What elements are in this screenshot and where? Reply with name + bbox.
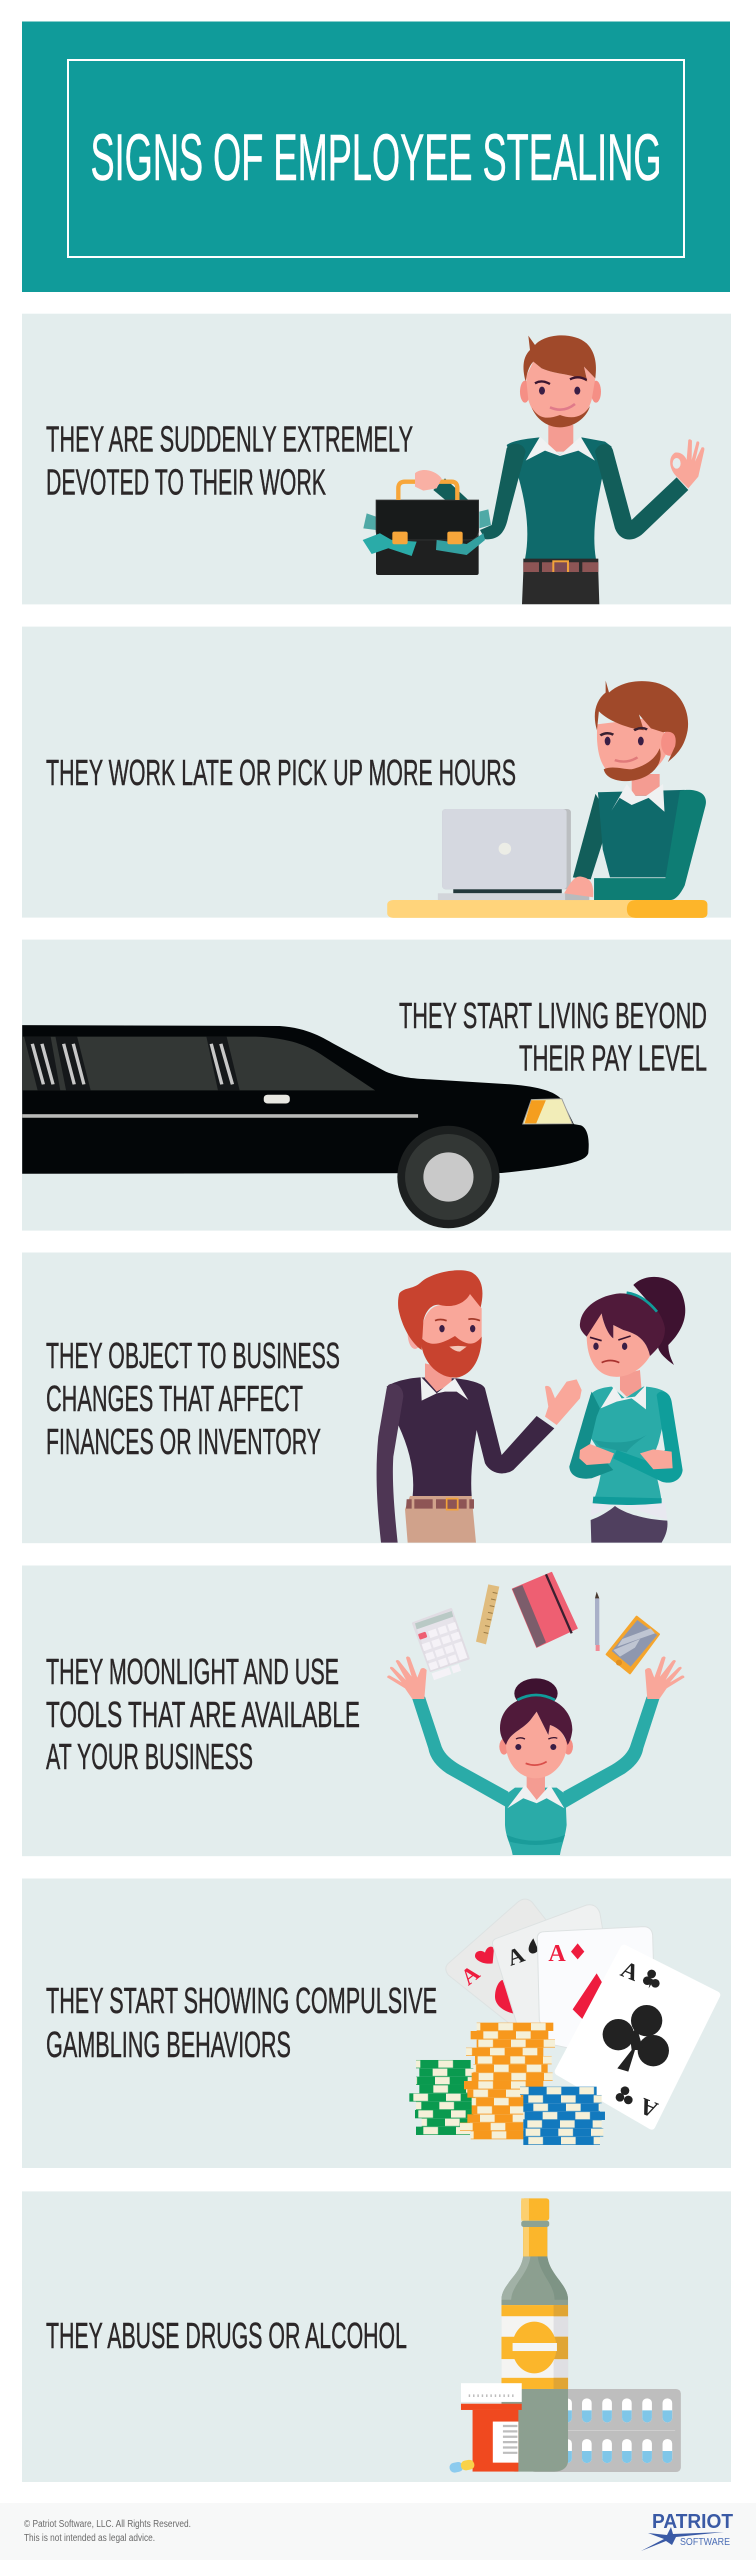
text: object to changes: FINANCES OR INVENTORY xyxy=(46,1421,321,1462)
panel: object to changes xyxy=(22,1252,731,1543)
card: ace of diamonds: A xyxy=(548,1941,566,1967)
blister pack xyxy=(530,2389,681,2472)
panel: works late xyxy=(22,627,731,918)
text: devoted: DEVOTED TO THEIR WORK xyxy=(46,462,326,502)
text: drugs or alcohol: THEY ABUSE DRUGS OR ALCOHOL xyxy=(46,2315,407,2356)
chips: orange stack xyxy=(460,2023,555,2139)
card: ace of hearts xyxy=(446,1899,593,2040)
text: object to changes: THEY OBJECT TO BUSINESS xyxy=(46,1335,340,1376)
illustration: man with briefcase of money xyxy=(363,335,704,604)
footer xyxy=(0,2503,756,2560)
footer legal text: © Patriot Software, LLC. All Rights Reserved. xyxy=(24,2519,191,2530)
text: gambling xyxy=(46,1980,437,2065)
text: object to changes xyxy=(46,1335,340,1462)
text: devoted xyxy=(46,418,413,502)
text: moonlighting: THEY MOONLIGHT AND USE xyxy=(46,1651,339,1692)
chips: blue stack xyxy=(520,2087,605,2145)
illustration: wine bottle and pills xyxy=(449,2198,681,2473)
card: ace of clubs xyxy=(558,1948,717,2126)
icon: calculator xyxy=(413,1609,471,1680)
text: gambling: GAMBLING BEHAVIORS xyxy=(46,2024,291,2065)
card: ace of spades xyxy=(492,1905,613,2037)
panel: gambling xyxy=(22,1878,731,2168)
footer legal text xyxy=(24,2519,191,2544)
logo: Patriot Software: PATRIOT xyxy=(652,2511,733,2533)
text: devoted: THEY ARE SUDDENLY EXTREMELY xyxy=(46,418,413,460)
capsule xyxy=(449,2459,475,2473)
icon: notebook xyxy=(512,1572,577,1647)
icon: pencil xyxy=(595,1592,600,1651)
card: ace of hearts: A xyxy=(456,1960,485,1990)
panel: moonlighting xyxy=(22,1566,731,1856)
illustration: man and woman arguing xyxy=(377,1270,685,1543)
icon: ruler xyxy=(476,1584,499,1644)
illustration: aces and poker chips xyxy=(409,1899,717,2145)
text: moonlighting: AT YOUR BUSINESS xyxy=(46,1736,253,1777)
title banner xyxy=(22,22,730,292)
panel: drugs or alcohol xyxy=(22,2191,731,2482)
pill bottle xyxy=(461,2383,522,2472)
card: ace of spades: A xyxy=(504,1941,528,1971)
footer legal text: This is not intended as legal advice. xyxy=(24,2533,155,2544)
panel: living beyond pay xyxy=(22,940,731,1231)
illustration: man at laptop xyxy=(387,681,707,918)
chips: green stack xyxy=(409,2060,475,2135)
text: living beyond pay xyxy=(399,995,707,1078)
text: object to changes: CHANGES THAT AFFECT xyxy=(46,1378,303,1419)
icon: smartphone xyxy=(607,1617,659,1673)
card: ace of diamonds xyxy=(537,1927,654,2053)
logo: Patriot Software: SOFTWARE xyxy=(680,2537,730,2548)
illustration: woman juggling office tools xyxy=(387,1572,684,1855)
illustration: black limousine xyxy=(22,1025,589,1228)
wine bottle xyxy=(501,2198,568,2472)
text: moonlighting: TOOLS THAT ARE AVAILABLE xyxy=(46,1694,360,1735)
text: moonlighting xyxy=(46,1651,360,1777)
text: gambling: THEY START SHOWING COMPULSIVE xyxy=(46,1980,437,2021)
card: ace of clubs: A xyxy=(636,2092,662,2123)
card: ace of clubs: A xyxy=(617,1956,643,1987)
panel: devoted to work xyxy=(22,314,731,604)
logo: Patriot Software xyxy=(641,2511,733,2551)
